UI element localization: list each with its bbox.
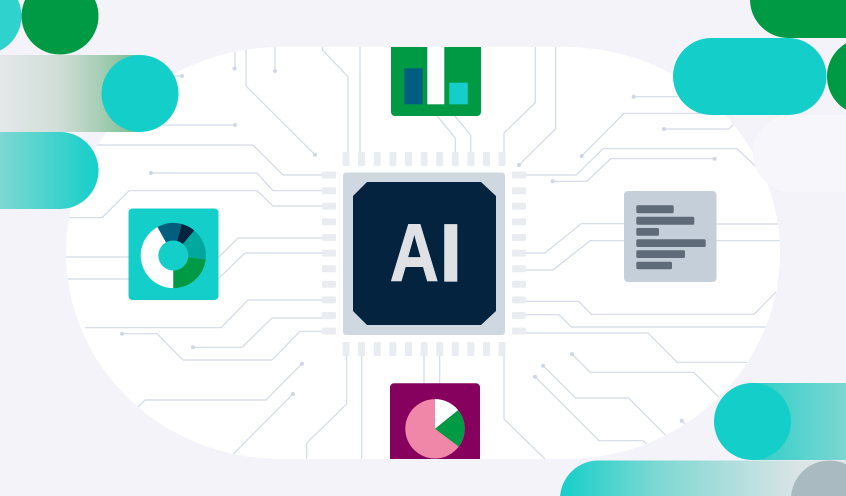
traces: top left <box>163 47 360 157</box>
chip pins: right <box>512 172 526 335</box>
bar: teal <box>449 83 468 104</box>
bar: blue <box>404 68 423 104</box>
chip core <box>353 182 496 325</box>
decorative blob: top left teal circle <box>0 0 21 50</box>
chip pins: left <box>322 172 336 335</box>
circuit traces <box>66 47 780 459</box>
pie chart <box>405 399 465 458</box>
white rounded board <box>66 47 780 459</box>
traces: top right <box>437 47 756 183</box>
donut chart <box>141 223 206 288</box>
chip label <box>390 207 462 299</box>
chip body <box>343 172 505 335</box>
chip pins: top <box>342 152 506 166</box>
icon: pie chart card <box>390 383 480 459</box>
decorative blob: bottom right teal circle <box>714 383 791 460</box>
bar: white <box>427 47 444 104</box>
chip label: I <box>439 208 462 299</box>
traces: right <box>526 224 780 362</box>
decorative blob: bottom right gray circle <box>791 460 846 496</box>
decorative blob: bottom right teal band <box>752 383 846 460</box>
decorative blob: teal pill left <box>0 132 98 209</box>
chip label: A <box>390 207 439 298</box>
decorative blob: teal pill right <box>673 38 826 115</box>
traces: bottom right <box>533 352 720 445</box>
text line bars <box>636 205 706 269</box>
chip pins: bottom <box>342 342 506 356</box>
AI chip <box>343 172 505 335</box>
traces: bottom left <box>137 355 545 459</box>
decorative blob: fading green band <box>0 55 140 132</box>
icon: donut chart card <box>128 208 218 300</box>
traces: left <box>66 145 323 360</box>
decorative blob: top right green pill <box>750 0 846 38</box>
icon: bar chart card <box>391 47 481 116</box>
decorative blob: right green circle <box>827 43 846 110</box>
decorative blob: bottom fading pill <box>560 460 846 496</box>
decorative blob: top left green circle <box>21 0 98 55</box>
decorative blob: teal circle <box>102 55 178 132</box>
decorative blob: pale pill <box>753 115 846 192</box>
icon: text lines card <box>624 191 716 282</box>
